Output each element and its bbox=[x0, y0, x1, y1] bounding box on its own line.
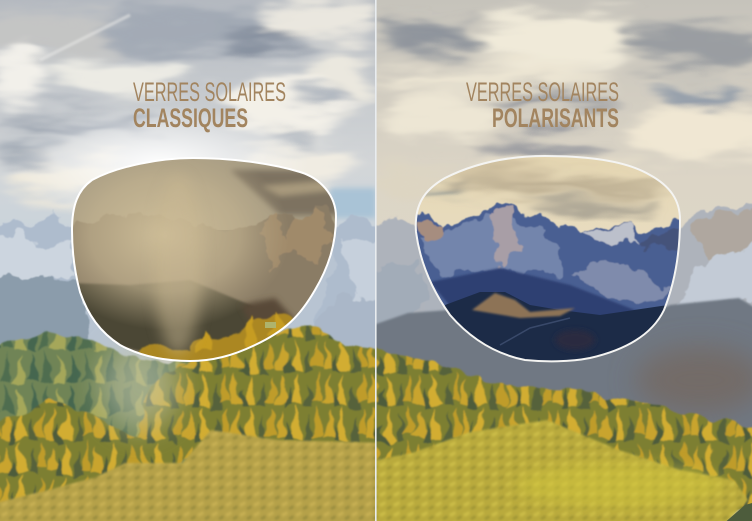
meadow bbox=[0, 430, 386, 521]
heading: polarized lenses bbox=[466, 77, 619, 133]
distant mountains bbox=[424, 272, 678, 312]
forest bbox=[366, 345, 752, 510]
distant mountains bbox=[82, 252, 337, 360]
heading: classic lenses: CLASSIQUES bbox=[133, 103, 248, 133]
heading: classic lenses: VERRES SOLAIRES bbox=[133, 77, 286, 107]
heading: classic lenses bbox=[133, 77, 286, 133]
classic lens tinted scene bbox=[73, 159, 335, 360]
forest bbox=[0, 324, 375, 504]
heading: polarized lenses: VERRES SOLAIRES bbox=[466, 77, 619, 107]
right background scene bbox=[350, 0, 752, 521]
lens: polarized sunglass view bbox=[410, 150, 690, 365]
polarized lens outline bbox=[416, 156, 680, 361]
heading: polarized lenses: POLARISANTS bbox=[492, 103, 619, 133]
lens: classic sunglass view bbox=[71, 157, 337, 362]
left background scene bbox=[0, 0, 386, 521]
dark hillside bbox=[376, 297, 752, 429]
center divider line bbox=[375, 0, 377, 521]
sky and clouds bbox=[0, 0, 375, 228]
meadow bbox=[366, 420, 748, 521]
polarized lens clear scene bbox=[416, 157, 679, 360]
pale forest haze bbox=[100, 340, 180, 430]
classic lens outline bbox=[72, 158, 336, 361]
sky and clouds bbox=[376, 0, 752, 228]
